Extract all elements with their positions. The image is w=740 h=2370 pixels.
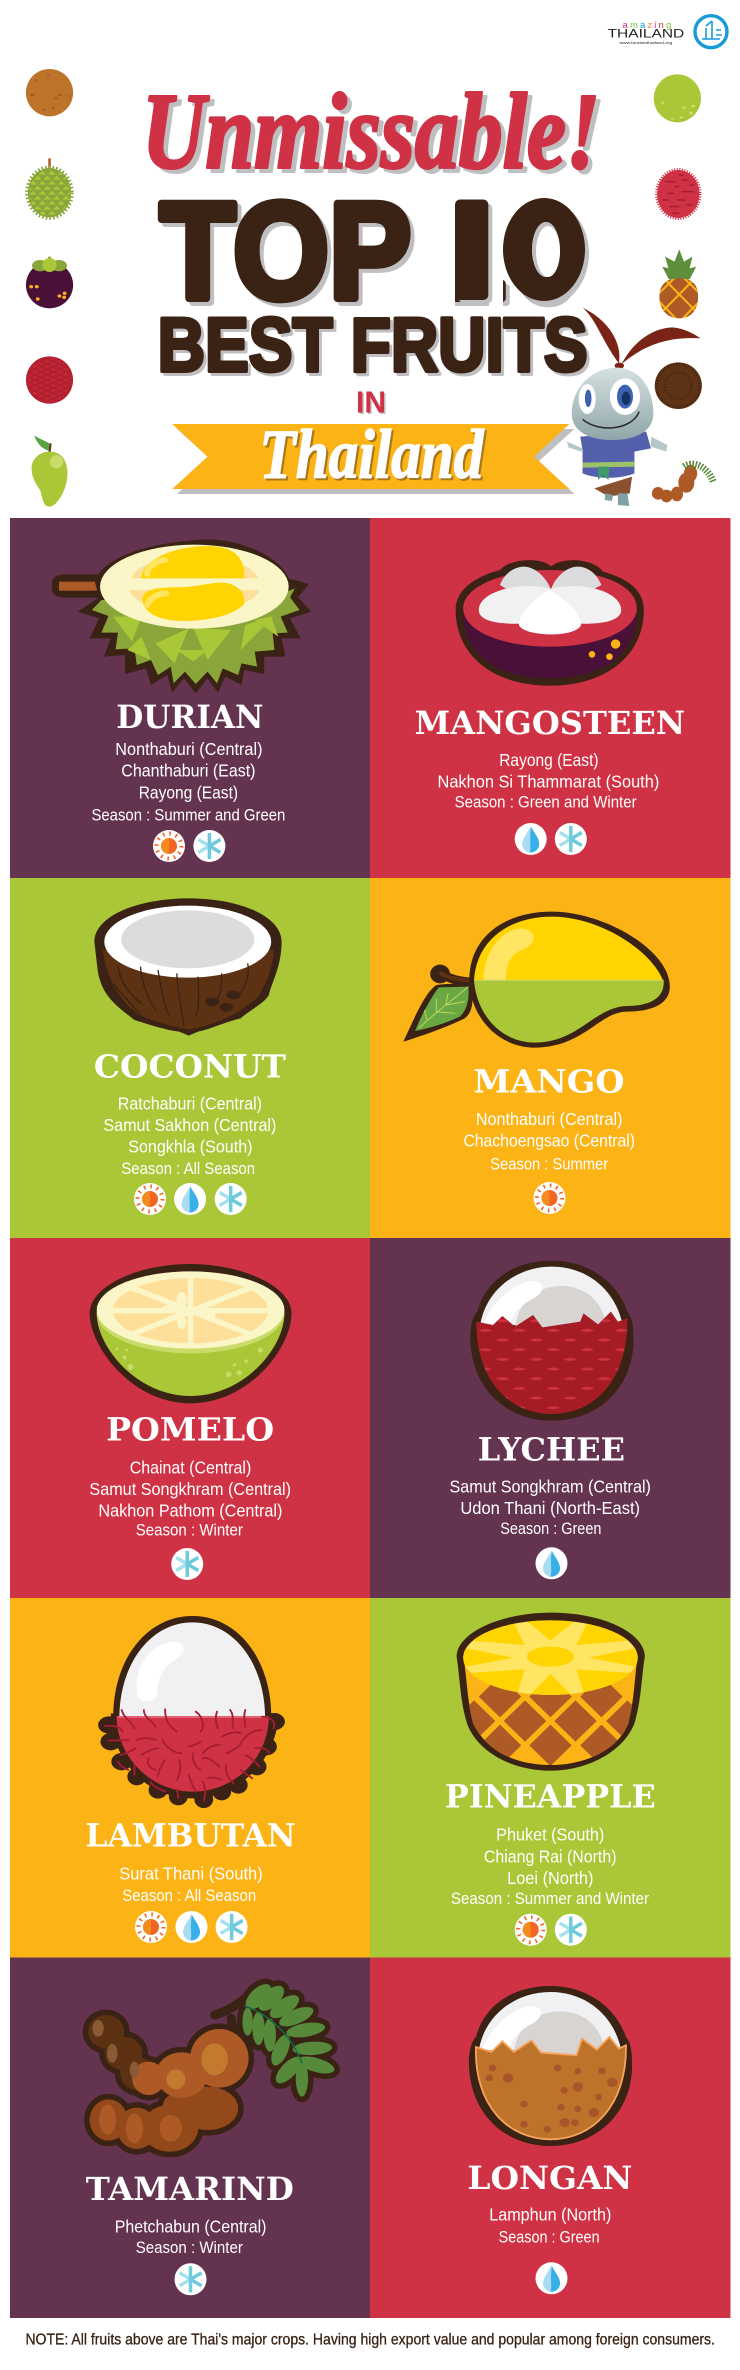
growing provinces and season: Season : All Season — [121, 1160, 255, 1178]
panel: durian — [10, 518, 370, 878]
icon: mangosteen fruit — [456, 560, 644, 686]
fruit name: TAMARIND — [86, 2171, 294, 2208]
fruit name: LYCHEE — [478, 1432, 625, 1469]
icon: pomelo — [654, 74, 701, 122]
growing provinces and season: Songkhla (South) — [128, 1137, 253, 1157]
title: TOP 10: 1 — [441, 178, 510, 331]
growing provinces and season: Chiang Rai (North) — [484, 1846, 616, 1866]
growing provinces and season: Ratchaburi (Central) — [118, 1093, 262, 1113]
growing provinces and season — [449, 1476, 651, 1538]
logo: Amazing Thailand: THAILAND — [608, 27, 685, 41]
growing provinces and season: Season : Summer — [490, 1155, 609, 1173]
season icon — [536, 2262, 568, 2294]
ribbon banner: Thailand — [172, 416, 574, 496]
panel: coconut — [10, 878, 370, 1238]
logo: Amazing Thailand — [608, 20, 685, 45]
growing provinces and season: Season : Summer and Winter — [451, 1890, 650, 1908]
side fruits, right column — [651, 74, 713, 502]
growing provinces and season — [89, 1457, 291, 1540]
season icons — [515, 1914, 587, 1946]
panel: pomelo — [10, 1238, 370, 1598]
ribbon banner: Thailand: Thailand — [262, 418, 486, 496]
growing provinces and season: Nonthaburi (Central) — [476, 1109, 623, 1129]
growing provinces and season: Samut Songkhram (Central) — [449, 1476, 651, 1496]
growing provinces and season: Season : Winter — [136, 2239, 243, 2257]
growing provinces and season — [451, 1825, 650, 1908]
panel: pineapple — [370, 1598, 730, 1958]
side fruits, left column — [26, 69, 73, 507]
growing provinces and season: Chanthaburi (East) — [121, 761, 256, 781]
logo: Amazing Thailand: www.tourismthailand.org — [620, 40, 672, 45]
logo: Amazing Thailand: amazing — [623, 20, 671, 31]
icon: tamarind — [652, 464, 713, 502]
icon: lychee — [26, 356, 73, 404]
growing provinces and season: Phuket (South) — [496, 1825, 604, 1845]
season icon — [171, 1548, 203, 1580]
growing provinces and season: Samut Sakhon (Central) — [103, 1115, 276, 1135]
icon: durian fruit — [52, 539, 311, 693]
icon: pineapple — [659, 250, 698, 318]
panel: longan — [370, 1958, 730, 2318]
title: TOP 10: 0 — [514, 178, 583, 331]
growing provinces and season — [463, 1109, 635, 1173]
icon: pomelo fruit — [90, 1264, 292, 1403]
growing provinces and season: Rayong (East) — [499, 750, 599, 770]
title: IN: IN — [356, 385, 386, 420]
season icons — [515, 823, 587, 855]
season icon — [536, 1547, 568, 1579]
logo: round emblem — [695, 16, 727, 48]
growing provinces and season: Season : All Season — [122, 1887, 256, 1905]
icon: coconut fruit — [94, 898, 282, 1036]
growing provinces and season: Season : Green — [499, 2228, 600, 2246]
ribbon banner: Thailand: Thailand — [260, 416, 484, 494]
title: TOP 10: 1 — [437, 174, 506, 327]
growing provinces and season: Lamphun (North) — [489, 2204, 611, 2224]
growing provinces and season: Surat Thani (South) — [119, 1863, 263, 1883]
title: TOP 10: 0 — [510, 174, 579, 327]
fruit name: LONGAN — [467, 2160, 632, 2197]
icon: pineapple fruit — [453, 1613, 649, 1771]
season icons — [134, 1183, 247, 1215]
growing provinces and season: Nakhon Si Thammarat (South) — [438, 772, 659, 792]
title: Unmissable!: Unmissable! — [142, 72, 600, 192]
title: Unmissable!: Unmissable! — [146, 76, 604, 196]
fruit name: MANGOSTEEN — [415, 705, 685, 742]
growing provinces and season: Season : Summer and Green — [91, 807, 285, 825]
growing provinces and season: Samut Songkhram (Central) — [89, 1479, 291, 1499]
growing provinces and season: Season : Winter — [136, 1522, 243, 1540]
icon: lychee fruit — [470, 1261, 633, 1421]
panel: tamarind — [10, 1958, 370, 2318]
icon: lambutan fruit — [98, 1616, 285, 1808]
growing provinces and season — [438, 750, 659, 812]
icon: longan fruit — [469, 1986, 632, 2146]
fruit name: COCONUT — [94, 1048, 286, 1085]
title: TOP 10: TOP — [164, 178, 447, 331]
season icons — [135, 1911, 248, 1943]
season icon — [534, 1182, 566, 1214]
icon: durian — [28, 158, 71, 217]
icon: mango fruit — [403, 912, 670, 1048]
season icon — [174, 2263, 206, 2295]
fruit name: MANGO — [473, 1063, 624, 1100]
growing provinces and season — [91, 739, 285, 825]
panel: lychee — [370, 1238, 730, 1598]
title: BEST FRUITS: BEST FRUITS — [160, 306, 590, 391]
fruit name: LAMBUTAN — [85, 1818, 296, 1855]
title: TOP 10: TOP — [160, 174, 443, 327]
icon: mangosteen — [26, 257, 73, 308]
icon: rambutan — [657, 170, 700, 218]
growing provinces and season: Season : Green and Winter — [455, 794, 637, 812]
growing provinces and season — [103, 1093, 276, 1178]
growing provinces and season: Chachoengsao (Central) — [463, 1131, 635, 1151]
growing provinces and season — [115, 2216, 266, 2257]
title: IN: IN — [358, 386, 388, 421]
growing provinces and season: Chainat (Central) — [130, 1457, 251, 1477]
growing provinces and season — [119, 1863, 263, 1905]
growing provinces and season: Nakhon Pathom (Central) — [98, 1501, 282, 1521]
title: BEST FRUITS: BEST FRUITS — [158, 303, 588, 388]
growing provinces and season: Rayong (East) — [139, 783, 238, 803]
growing provinces and season: Season : Green — [500, 1520, 601, 1538]
season icons — [153, 830, 225, 862]
mascot character — [567, 308, 700, 506]
growing provinces and season: Loei (North) — [507, 1868, 593, 1888]
growing provinces and season: Phetchabun (Central) — [115, 2216, 266, 2236]
fruit name: POMELO — [106, 1412, 274, 1449]
panel: lambutan — [10, 1598, 370, 1958]
growing provinces and season — [489, 2204, 611, 2246]
growing provinces and season: Udon Thani (North-East) — [460, 1498, 640, 1518]
growing provinces and season: Nonthaburi (Central) — [115, 739, 262, 759]
title: TOP 10 — [160, 174, 589, 331]
icon: mango — [32, 436, 67, 507]
icon: longan — [26, 69, 73, 116]
icon: coconut — [655, 362, 702, 409]
icon: tamarind fruit — [88, 1981, 338, 2152]
panel: mangosteen — [370, 518, 730, 878]
header — [26, 16, 727, 507]
fruit name: PINEAPPLE — [445, 1779, 656, 1816]
panel: mango — [370, 878, 730, 1238]
fruit name: DURIAN — [116, 699, 264, 736]
